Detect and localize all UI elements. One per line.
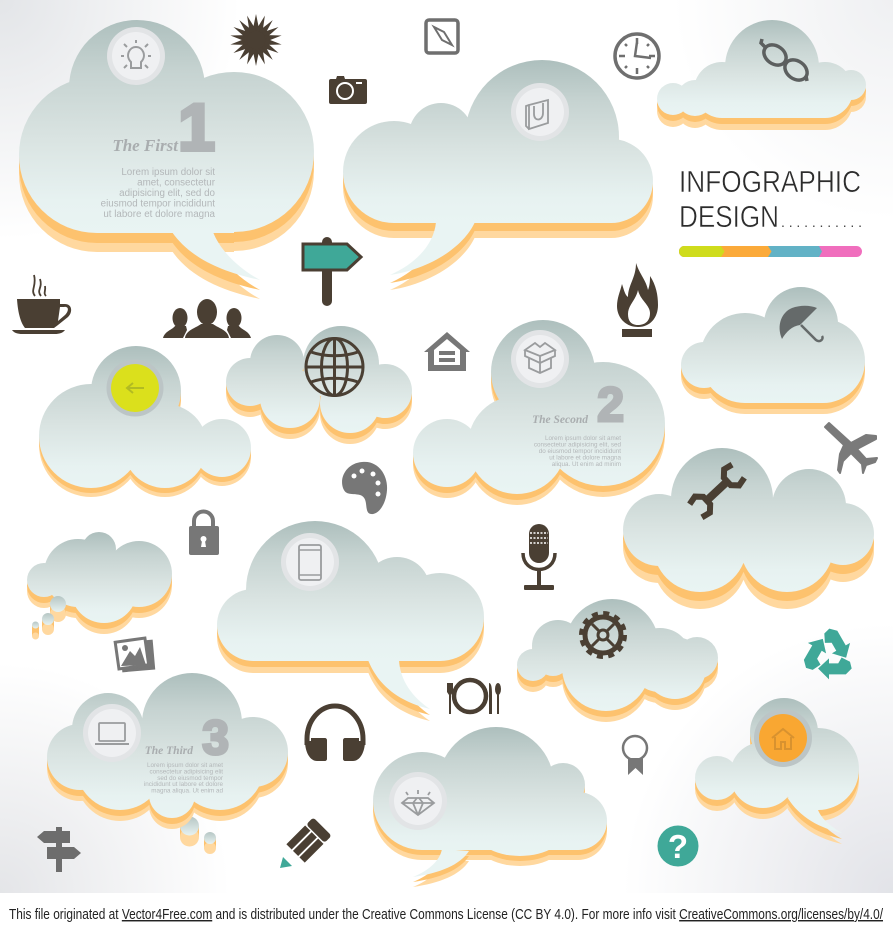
icon: open box — [511, 330, 569, 388]
cloud layers — [47, 673, 288, 829]
icon: wrench — [688, 463, 746, 519]
body text: magna aliqua. Ut enim ad — [151, 788, 223, 794]
icon: lock — [189, 512, 219, 555]
cloud layers — [39, 346, 251, 497]
icon: sun — [230, 14, 282, 66]
cloud layers — [27, 532, 172, 634]
thought bubbles — [32, 596, 66, 640]
body text: adipisicing elit, sed do — [119, 188, 216, 199]
icon: direction signpost — [37, 827, 81, 872]
heading dots: ........... — [781, 214, 862, 230]
cloud panel: orange home — [695, 698, 859, 844]
cloud panel: thought small — [27, 532, 172, 640]
icon: compass — [426, 20, 458, 53]
icon: umbrella — [780, 306, 823, 341]
cloud layers — [226, 326, 412, 444]
cloud panel: The Second — [413, 320, 665, 505]
icon: award ribbon — [623, 736, 647, 775]
icon: photo stack — [115, 638, 154, 671]
cloud layers — [681, 287, 865, 414]
heading line 1: INFOGRAPHIC — [679, 164, 861, 199]
icon: flame — [617, 263, 658, 337]
number 2: 2 — [597, 379, 624, 432]
icon: clock — [615, 34, 659, 78]
icon: coffee cup — [12, 275, 71, 334]
icon: signpost arrow — [303, 237, 361, 306]
cloud panel: umbrella — [681, 287, 865, 414]
icon: recycle — [797, 623, 856, 679]
icon: laptop — [83, 704, 141, 762]
icon: headphones — [305, 706, 365, 761]
cloud panel: globe — [226, 326, 412, 444]
icon: lime arrow button — [106, 360, 164, 416]
cloud panel: gear — [517, 599, 718, 722]
cloud panel: diamond — [373, 727, 607, 887]
icon: gear — [582, 614, 624, 656]
body text: Lorem ipsum dolor sit amet — [545, 435, 621, 442]
body text: incididunt ut labore et dolore — [144, 781, 223, 788]
cloud panel: The First — [19, 20, 314, 299]
icon: glasses — [760, 39, 811, 84]
icon: palette — [342, 462, 387, 514]
icon: plate and cutlery — [447, 680, 501, 714]
icon: question mark — [658, 826, 698, 866]
icon: shopping bag — [511, 83, 569, 141]
heading: The Second: The Second — [532, 414, 588, 426]
icon: equal housing — [424, 332, 470, 371]
cloud layers — [657, 20, 866, 130]
icon: people — [163, 299, 251, 338]
cloud layers — [413, 320, 665, 505]
icon: question mark: ? — [668, 828, 688, 865]
icon: orange home button — [754, 709, 812, 767]
cloud layers — [343, 60, 653, 290]
heading line 2: DESIGN — [679, 199, 779, 234]
cloud layers — [623, 448, 874, 609]
cloud panel: The Third — [47, 673, 288, 854]
body text: consectetur adipisicing elit, sed — [534, 442, 621, 448]
body text: sed do eiusmod tempor — [157, 775, 223, 782]
body text: ut labore et dolore magna — [103, 209, 216, 220]
body text: aliqua. Ut enim ad minim — [552, 461, 621, 468]
icon: airplane — [825, 423, 877, 473]
icon: diamond — [389, 772, 447, 830]
icon: lightbulb — [107, 27, 165, 85]
cloud layers — [695, 698, 859, 844]
cloud panel: arrow — [39, 346, 251, 497]
cloud panel: phone — [217, 521, 484, 721]
heading: The First: The First — [112, 136, 179, 155]
cloud panel: glasses — [657, 20, 866, 130]
body text: consectetur adipisicing elit — [149, 768, 223, 776]
body text: Lorem ipsum dolor sit — [121, 167, 215, 178]
body text: eiusmod tempor incididunt — [101, 198, 215, 210]
cloud panel: shopping bag — [343, 60, 653, 290]
number 3: 3 — [202, 712, 229, 765]
cloud layers — [19, 20, 314, 299]
cloud panel: wrench — [623, 448, 874, 609]
cloud layers — [517, 599, 718, 722]
icon: pencil — [280, 817, 332, 868]
body text: do eiusmod tempor incididunt — [539, 448, 621, 455]
cloud layers — [217, 521, 484, 721]
color bar — [679, 246, 862, 257]
cloud layers — [373, 727, 607, 887]
body text: amet, consectetur — [137, 178, 216, 188]
title — [679, 164, 862, 257]
icon: globe — [306, 338, 363, 396]
icon: microphone — [523, 524, 555, 590]
icon: phone — [281, 533, 339, 591]
thought bubbles — [180, 816, 216, 854]
heading: The Third: The Third — [145, 745, 193, 757]
number 1: 1 — [178, 90, 215, 164]
body text: Lorem ipsum dolor sit amet — [147, 762, 223, 769]
body text: ut labore et dolore magna — [549, 454, 621, 462]
icon: camera — [329, 76, 367, 104]
